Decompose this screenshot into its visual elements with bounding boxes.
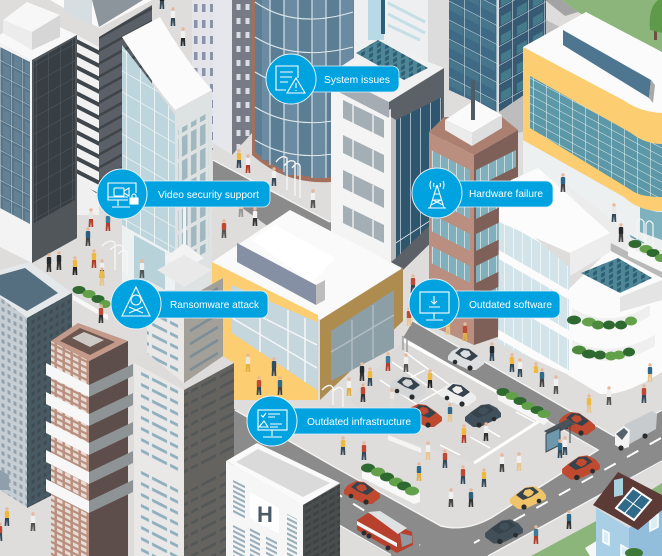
icon: radio tower bbox=[428, 181, 446, 208]
label: ransomware attack: Ransomware attack bbox=[170, 299, 260, 311]
callout: system issues bbox=[266, 54, 399, 104]
park lawn top right bbox=[562, 0, 662, 58]
bottom left grey-blue building bbox=[0, 262, 72, 508]
icon: document warning bbox=[276, 66, 305, 93]
callout: ransomware attack bbox=[111, 279, 268, 329]
label: hardware failure: Hardware failure bbox=[469, 188, 543, 200]
delivery truck bbox=[615, 411, 657, 451]
fire truck bbox=[357, 511, 413, 553]
solar panels on centre roof bbox=[356, 40, 428, 80]
label: outdated software: Outdated software bbox=[469, 299, 552, 311]
label: outdated infrastructure: Outdated infrastructure bbox=[307, 416, 411, 428]
dark teal tower bbox=[449, 0, 570, 135]
back tower with small windows bbox=[192, 0, 252, 155]
icon: skull warning triangle bbox=[122, 287, 150, 316]
curved glass office tower bbox=[252, 0, 356, 182]
parking lot bbox=[350, 340, 544, 463]
label: video security support: Video security support bbox=[158, 189, 259, 201]
top left dark glass building bbox=[0, 2, 77, 263]
label: system issues: System issues bbox=[324, 74, 390, 86]
hedge upper bbox=[567, 316, 637, 330]
brown tower bbox=[429, 80, 518, 345]
tall white tower bbox=[134, 205, 234, 556]
street lamps bbox=[102, 157, 407, 407]
tree in park bbox=[650, 0, 662, 40]
white curved building bbox=[498, 168, 662, 394]
balconies left side bbox=[46, 363, 89, 513]
solar panels on white building bbox=[581, 258, 652, 293]
low gold building bbox=[212, 210, 403, 400]
callout: hardware failure bbox=[412, 168, 553, 218]
callout: outdated software bbox=[409, 279, 560, 329]
white rear building bbox=[354, 0, 450, 130]
hospital building bbox=[226, 443, 340, 556]
planter in plaza bbox=[361, 464, 420, 504]
top road bbox=[545, 0, 578, 16]
hedge lower bbox=[572, 346, 635, 360]
bus stop bbox=[544, 419, 575, 452]
hospital H sign: H bbox=[257, 502, 273, 527]
curved roof glass building bbox=[122, 17, 212, 290]
hedge top of left block bbox=[72, 286, 110, 320]
road network bbox=[213, 160, 662, 556]
brown balcony tower bbox=[46, 323, 133, 556]
top left striped building bbox=[50, 0, 152, 215]
icon: monitor checklist bbox=[258, 410, 287, 437]
callout: video security support bbox=[97, 169, 270, 219]
balconies right side bbox=[89, 364, 133, 513]
pavement and planter beside yellow building bbox=[560, 180, 662, 282]
house bbox=[531, 472, 662, 556]
callout: outdated infrastructure bbox=[247, 396, 421, 446]
cars bbox=[344, 347, 600, 544]
yellow roofed building bbox=[523, 12, 662, 250]
icon: monitor download bbox=[420, 292, 449, 320]
planter by parking bbox=[496, 388, 550, 425]
centre grey office with solar roof bbox=[331, 40, 444, 270]
icon: video monitor with lock bbox=[108, 183, 138, 207]
